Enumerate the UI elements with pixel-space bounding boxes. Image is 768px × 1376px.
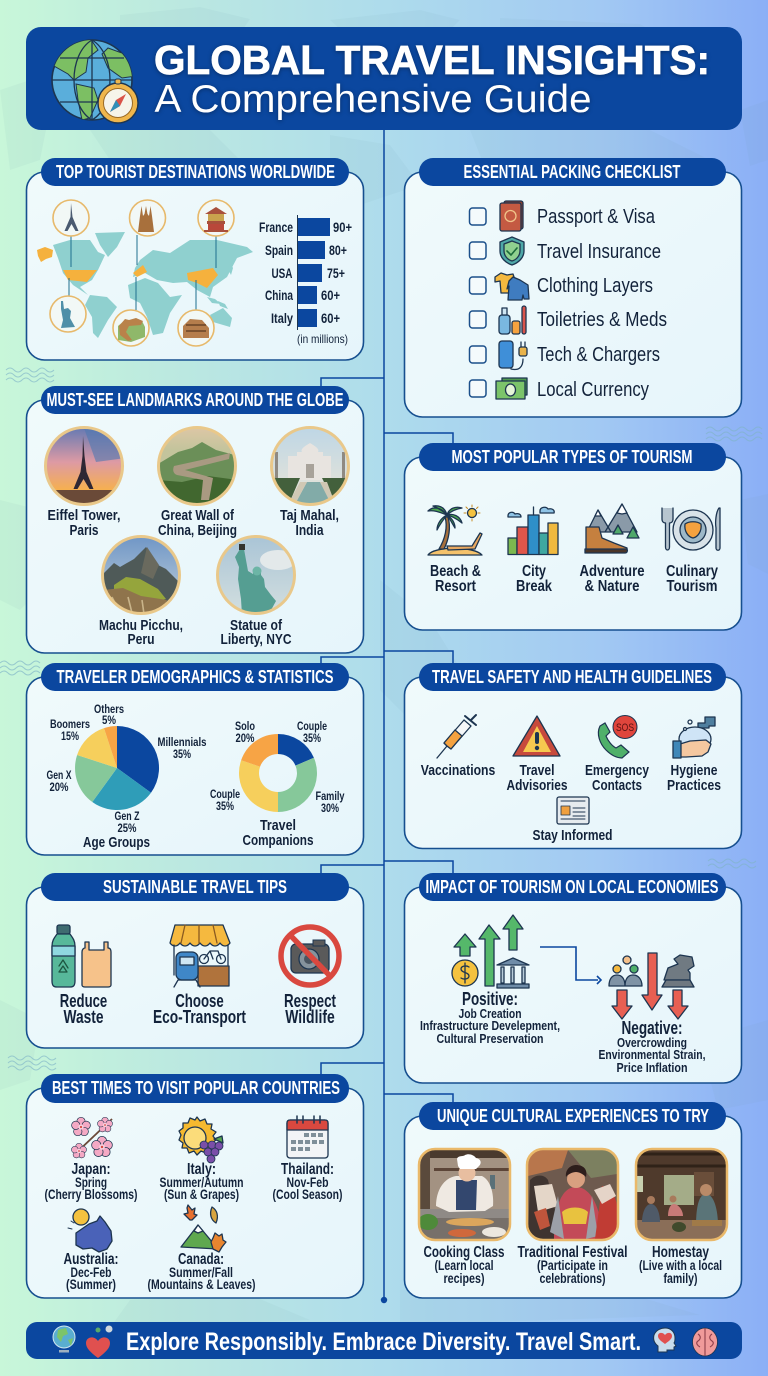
- donut chart: travel companions: 20%: [236, 733, 254, 745]
- landmark captions: Peru: [128, 631, 154, 648]
- icon: Eiffel Tower badge: [53, 200, 89, 236]
- photo: traditional festival: [527, 1149, 618, 1240]
- heading: sustainable: SUSTAINABLE TRAVEL TIPS: [103, 877, 287, 897]
- arrow: positive to negative: [540, 947, 601, 984]
- cultural captions: family): [664, 1271, 698, 1286]
- best-times captions: (Cherry Blossoms): [44, 1187, 138, 1202]
- bar chart: visitors by country: 90+: [333, 220, 352, 235]
- panel: impact of tourism: [404, 873, 742, 1083]
- text: negative impacts: Overcrowding: [617, 1036, 687, 1050]
- panel: traveler demographics: [26, 663, 364, 855]
- icon: market stall with train and bicycle: [170, 925, 230, 987]
- world map: [37, 232, 253, 338]
- panel: packing checklist: [404, 158, 742, 417]
- icon: Colosseum badge: [178, 310, 214, 346]
- icon: emergency phone: [598, 716, 637, 758]
- text: negative impacts: Negative:: [622, 1018, 682, 1038]
- tourism captions: Beach &: [430, 563, 481, 580]
- photo: Machu Picchu: [101, 535, 182, 616]
- tourism captions: [430, 563, 718, 595]
- icon: calendar: [287, 1116, 328, 1158]
- icon: insurance shield: [500, 237, 524, 265]
- landmark captions: Eiffel Tower,: [48, 507, 120, 524]
- bar chart: visitors by country: France: [259, 220, 293, 235]
- icon: globe with compass: [52, 38, 138, 123]
- best-times captions: (Cool Season): [272, 1187, 342, 1202]
- bar chart: visitors by country: 60+: [321, 311, 340, 326]
- text: positive impacts: Infrastructure Develepment,: [420, 1019, 560, 1033]
- landmark captions: Great Wall of: [161, 507, 235, 524]
- best-times captions: Thailand:: [281, 1161, 334, 1178]
- safety captions: Vaccinations: [421, 762, 495, 779]
- pie chart: age groups: 25%: [118, 823, 136, 835]
- bar chart: visitors by country: 60+: [321, 288, 340, 303]
- icon: hiking boot and mountains: [585, 504, 639, 553]
- icon: small globe: [53, 1326, 75, 1352]
- bar chart: visitors by country: [259, 215, 352, 346]
- heading: cultural: [419, 1102, 726, 1130]
- heading: landmarks: [41, 386, 349, 414]
- heading: sustainable: [41, 873, 349, 901]
- best-times captions: Australia:: [64, 1251, 118, 1268]
- text: positive impacts: [420, 989, 560, 1046]
- sustainable captions: Eco-Transport: [153, 1007, 246, 1027]
- donut chart: travel companions: Family: [316, 791, 345, 803]
- icon: positive growth arrows: [452, 915, 529, 988]
- icon: toiletries: [499, 306, 526, 334]
- photo: homestay: [636, 1149, 727, 1240]
- cultural captions: Homestay: [652, 1244, 709, 1261]
- icon: Statue of Liberty badge: [50, 296, 86, 332]
- heading: packing checklist: [419, 158, 726, 186]
- heading: top tourist destinations: TOP TOURIST DESTINATIONS WORLDWIDE: [56, 162, 335, 182]
- pie chart: age groups: 35%: [173, 749, 191, 761]
- photo: Statue of Liberty: [216, 535, 296, 615]
- tourism captions: Tourism: [666, 578, 718, 595]
- checklist boxes: [470, 208, 486, 397]
- photo: cooking class: [418, 1149, 510, 1240]
- donut chart: travel companions: [210, 721, 345, 849]
- heading: landmarks: MUST-SEE LANDMARKS AROUND THE GLOBE: [46, 390, 344, 410]
- best-times captions: (Sun & Grapes): [164, 1187, 239, 1202]
- pie chart: age groups: 20%: [50, 782, 68, 794]
- bar chart: visitors by country: 80+: [329, 243, 347, 258]
- tourism captions: Culinary: [666, 563, 718, 580]
- pie chart: age groups: 15%: [61, 731, 79, 743]
- icon: head with heart: [654, 1328, 676, 1352]
- heading: packing checklist: ESSENTIAL PACKING CHECKLIST: [464, 162, 681, 182]
- pie chart: age groups: Gen Z: [114, 811, 140, 823]
- panel: cultural experiences: [404, 1102, 742, 1298]
- donut chart: travel companions: Solo: [235, 721, 255, 733]
- best-times captions: (Summer): [66, 1277, 116, 1292]
- checklist labels: [537, 205, 667, 401]
- landmark captions: Taj Mahal,: [280, 507, 339, 524]
- best-times captions: (Mountains & Leaves): [148, 1277, 256, 1292]
- icon: beach and palm: [428, 505, 482, 555]
- panel: top tourist destinations: [26, 158, 364, 360]
- donut chart: travel companions: Travel: [260, 817, 296, 834]
- heading: top tourist destinations: [41, 158, 349, 186]
- donut chart: travel companions: Companions: [242, 832, 314, 849]
- donut chart: travel companions: 30%: [321, 803, 339, 815]
- heading: best times: [41, 1074, 349, 1103]
- cultural captions: (Participate in: [537, 1258, 608, 1273]
- bar chart: visitors by country: USA: [272, 266, 293, 281]
- donut chart: travel companions: 35%: [303, 733, 321, 745]
- donut chart: travel companions: Couple: [210, 789, 240, 801]
- best-times captions: Summer/Autumn: [160, 1175, 244, 1190]
- cultural captions: Traditional Festival: [518, 1244, 628, 1261]
- tourism captions: Resort: [435, 578, 477, 595]
- pie chart: age groups: Others: [94, 704, 124, 716]
- text: negative impacts: [598, 1018, 706, 1075]
- sustainable captions: Reduce: [60, 991, 107, 1011]
- photo: Taj Mahal: [270, 426, 350, 506]
- tourism captions: & Nature: [584, 578, 640, 595]
- checklist labels: Tech & Chargers: [537, 343, 660, 366]
- heading: demographics: TRAVELER DEMOGRAPHICS & STATISTICS: [56, 667, 334, 687]
- bar chart: visitors by country: (in millions): [297, 332, 348, 346]
- cultural captions: Cooking Class: [424, 1244, 505, 1261]
- text: positive impacts: Positive:: [462, 989, 518, 1009]
- icon: newspaper: [557, 797, 589, 824]
- footer slogan: Explore Responsibly. Embrace Diversity. Travel Smart.: [126, 1328, 641, 1356]
- bar chart: visitors by country: Spain: [265, 243, 293, 258]
- icon: syringe: [437, 715, 476, 758]
- best-times captions: Italy:: [187, 1161, 216, 1178]
- safety captions: Hygiene: [670, 762, 718, 779]
- cultural captions: recipes): [444, 1271, 484, 1286]
- landmark captions: Machu Picchu,: [99, 617, 183, 634]
- text: negative impacts: Price Inflation: [616, 1061, 688, 1075]
- landmark captions: Liberty, NYC: [220, 631, 292, 648]
- landmark captions: China, Beijing: [158, 522, 237, 539]
- checklist labels: Toiletries & Meds: [537, 308, 667, 331]
- best-times captions: Nov-Feb: [286, 1175, 328, 1190]
- icon: brain: [692, 1328, 718, 1356]
- icon: sun and grapes: [179, 1117, 223, 1163]
- cultural captions: (Live with a local: [639, 1258, 722, 1273]
- panel: safety and health: [404, 663, 742, 848]
- heading: types of tourism: [419, 443, 726, 471]
- icon: mountains and autumn leaves: [181, 1205, 226, 1252]
- icon: clothing layers: [495, 273, 529, 300]
- icon: plate and cutlery: [662, 508, 720, 550]
- checklist labels: Local Currency: [537, 378, 650, 401]
- pie chart: age groups: Boomers: [50, 719, 90, 731]
- sustainable captions: [60, 991, 336, 1027]
- icon: banknotes: [496, 378, 527, 399]
- sustainable captions: Waste: [64, 1007, 104, 1027]
- heading: demographics: [41, 663, 349, 691]
- checklist labels: Passport & Visa: [537, 205, 655, 228]
- icon: emergency phone: SOS: [616, 722, 634, 734]
- tourism captions: Break: [516, 578, 552, 595]
- panel: best times to visit: [26, 1074, 364, 1298]
- landmark captions: India: [296, 522, 324, 539]
- sustainable captions: Wildlife: [285, 1007, 335, 1027]
- icon: warning triangle: [513, 716, 560, 756]
- tourism captions: Adventure: [580, 563, 645, 580]
- cultural captions: (Learn local: [434, 1258, 494, 1273]
- checklist labels: Clothing Layers: [537, 274, 653, 297]
- donut chart: travel companions: Couple: [297, 721, 327, 733]
- heading: best times: BEST TIMES TO VISIT POPULAR COUNTRIES: [52, 1078, 340, 1098]
- heading: safety: [419, 663, 726, 691]
- icon: phone and charger: [499, 341, 527, 370]
- icon: Great Wall badge: [113, 310, 149, 346]
- panel: sustainable travel tips: [26, 873, 364, 1048]
- bar chart: visitors by country: China: [265, 288, 293, 303]
- best-times captions: Japan:: [72, 1161, 110, 1178]
- sustainable captions: Respect: [284, 991, 336, 1011]
- icon: heart with pins: [86, 1326, 112, 1358]
- sustainable captions: Choose: [175, 991, 224, 1011]
- safety captions: Emergency: [585, 762, 650, 779]
- pie chart: age groups: 5%: [102, 715, 116, 727]
- icon: negative downward arrows: [609, 953, 694, 1019]
- header banner: [26, 27, 742, 130]
- heading: impact: [419, 873, 726, 901]
- footer banner: [26, 1322, 742, 1359]
- title text: A Comprehensive Guide: [154, 78, 592, 121]
- best-times captions: [44, 1161, 342, 1292]
- safety captions: Practices: [667, 777, 721, 794]
- checklist labels: Travel Insurance: [537, 240, 661, 263]
- icon: bottle and bag: [52, 925, 111, 987]
- pie chart: age groups: Gen X: [46, 770, 72, 782]
- icon: Australia with sun: [68, 1209, 112, 1252]
- best-times captions: Summer/Fall: [169, 1265, 233, 1280]
- title text: GLOBAL TRAVEL INSIGHTS:: [154, 37, 710, 83]
- photo: Great Wall: [157, 426, 238, 506]
- icon: cherry blossoms: [71, 1117, 113, 1158]
- best-times captions: Canada:: [178, 1251, 224, 1268]
- icon: hand washing: [673, 717, 715, 758]
- panel: must-see landmarks: [26, 386, 364, 653]
- text: positive impacts: Job Creation: [458, 1007, 522, 1021]
- pie chart: age groups: Age Groups: [83, 834, 150, 851]
- safety captions: Contacts: [592, 777, 642, 794]
- text: positive impacts: Cultural Preservation: [436, 1032, 544, 1046]
- landmark captions: [48, 507, 339, 648]
- landmark captions: Statue of: [230, 617, 283, 634]
- donut chart: travel companions: 35%: [216, 801, 234, 813]
- safety captions: Advisories: [506, 777, 568, 794]
- pie chart: age groups: [46, 704, 206, 851]
- icon: temple badge: [198, 200, 234, 236]
- text: negative impacts: Environmental Strain,: [598, 1048, 706, 1062]
- safety captions: [421, 762, 721, 844]
- best-times captions: Spring: [75, 1175, 107, 1190]
- pie chart: age groups: Millennials: [158, 737, 206, 749]
- cultural captions: [424, 1244, 722, 1286]
- cultural captions: celebrations): [540, 1271, 606, 1286]
- bar chart: visitors by country: 75+: [327, 266, 345, 281]
- tourism captions: City: [522, 563, 546, 580]
- panel: types of tourism: [404, 443, 742, 630]
- photo: Eiffel Tower: [44, 426, 126, 506]
- landmark captions: Paris: [70, 522, 98, 539]
- icon: city skyline: [508, 507, 558, 554]
- best-times captions: Dec-Feb: [70, 1265, 112, 1280]
- connector lines: [321, 130, 453, 1303]
- safety captions: Travel: [520, 762, 554, 779]
- bar chart: visitors by country: Italy: [271, 311, 293, 326]
- title text: [154, 37, 710, 121]
- icon: passport: [500, 201, 523, 231]
- safety captions: Stay Informed: [532, 827, 612, 844]
- decorative wave marks: [0, 368, 762, 1070]
- icon: Sagrada Familia badge: [130, 200, 166, 236]
- icon: no photography sign: [281, 927, 339, 985]
